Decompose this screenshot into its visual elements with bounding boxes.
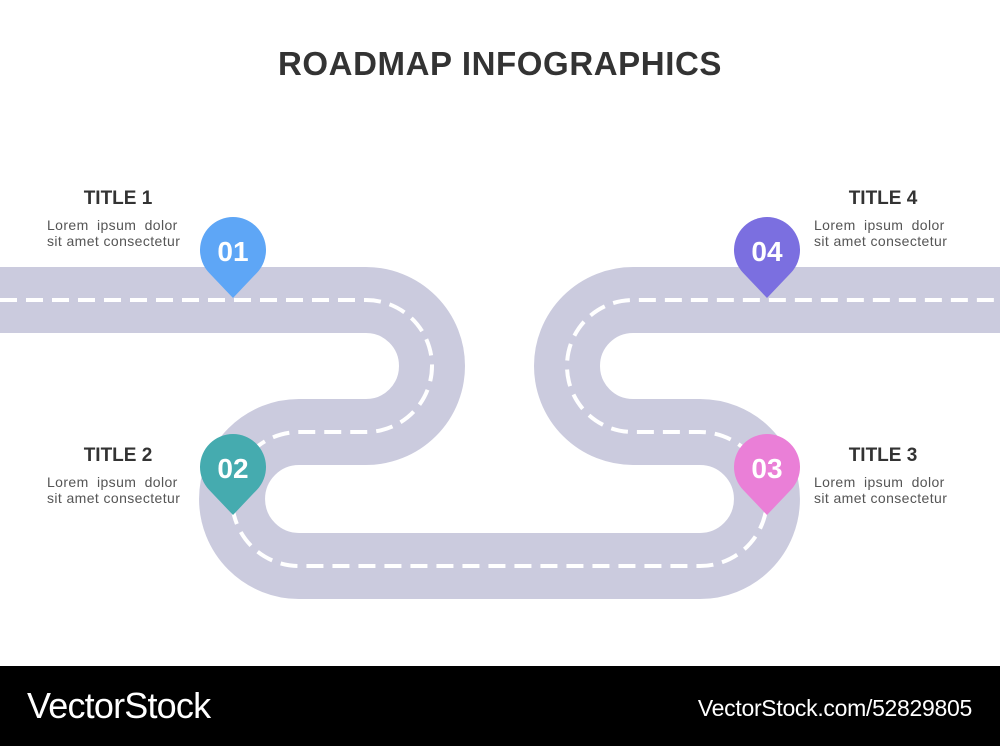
footer: [0, 666, 1000, 746]
title: ROADMAP INFOGRAPHICS: [278, 45, 722, 82]
footer logo: VectorStock: [27, 685, 210, 726]
pin 04: 04: [751, 236, 783, 267]
pin 02: 02: [217, 453, 249, 484]
desc 1: [47, 217, 180, 249]
desc 3: sit amet consectetur: [814, 490, 947, 506]
text: title 2: TITLE 2: [84, 445, 152, 466]
text: title 1: TITLE 1: [84, 188, 152, 209]
desc 3: Lorem ipsum dolor: [814, 474, 945, 490]
desc 3: [814, 474, 947, 506]
pin 01: 01: [217, 236, 249, 267]
footer url: VectorStock.com/52829805: [698, 695, 972, 721]
text: title 3: TITLE 3: [849, 445, 917, 466]
desc 2: sit amet consectetur: [47, 490, 180, 506]
pin 04: [734, 217, 800, 298]
pin 03: [734, 434, 800, 515]
desc 4: sit amet consectetur: [814, 233, 947, 249]
pin 03: 03: [751, 453, 783, 484]
text: title 4: TITLE 4: [849, 188, 917, 209]
desc 2: Lorem ipsum dolor: [47, 474, 178, 490]
pin 01: [200, 217, 266, 298]
desc 1: Lorem ipsum dolor: [47, 217, 178, 233]
road: [0, 300, 1000, 566]
desc 2: [47, 474, 180, 506]
desc 4: [814, 217, 947, 249]
pin 02: [200, 434, 266, 515]
desc 4: Lorem ipsum dolor: [814, 217, 945, 233]
desc 1: sit amet consectetur: [47, 233, 180, 249]
